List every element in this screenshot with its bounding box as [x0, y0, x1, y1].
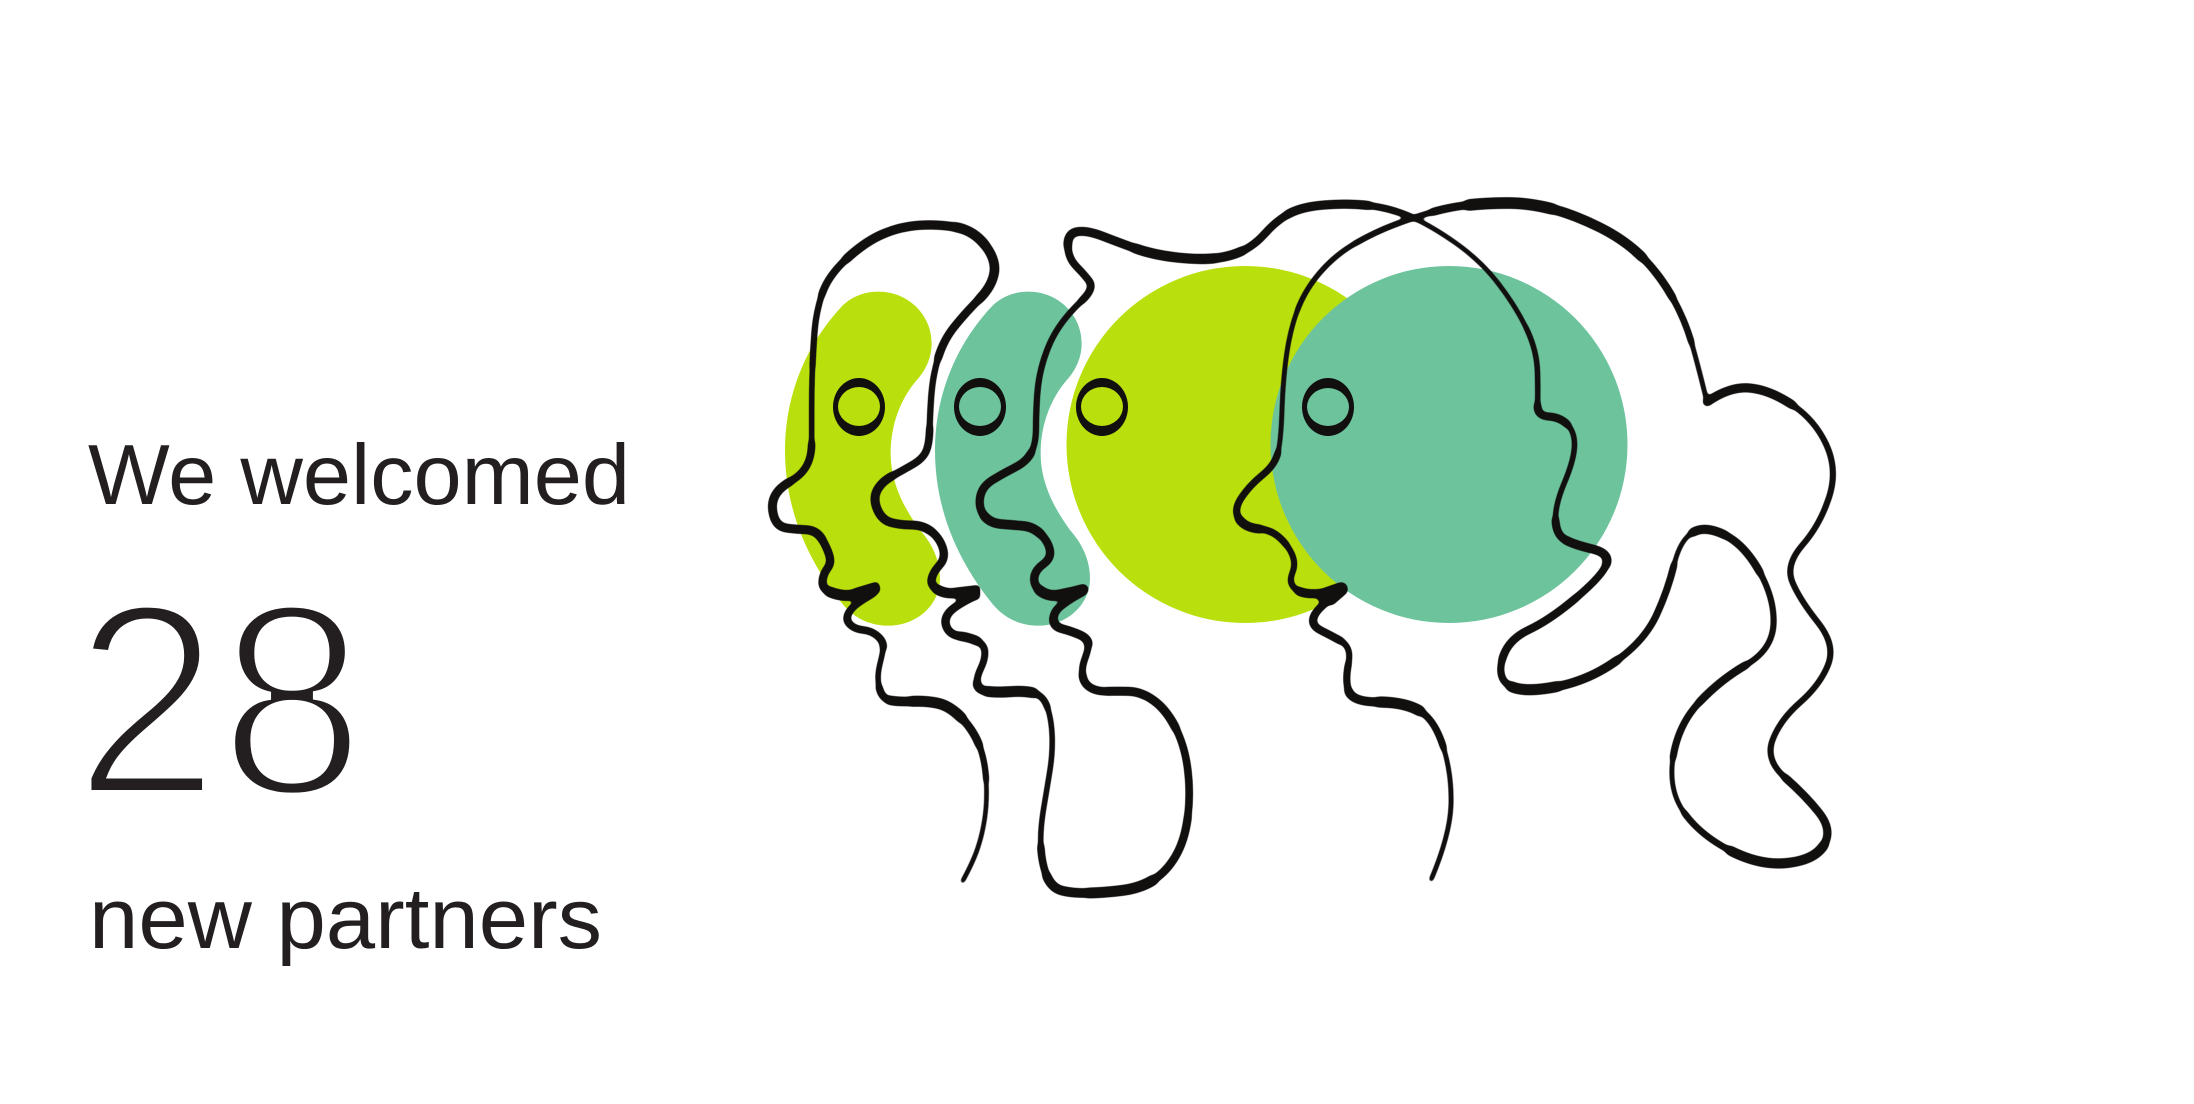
line: first face profile and hair	[772, 225, 995, 596]
line: fourth face nose and lips	[1237, 452, 1347, 605]
icon: first face lip	[848, 582, 879, 603]
icon: second face lip	[953, 586, 979, 604]
text: new partners: new partners	[89, 871, 602, 967]
illustration: background colour shapes	[785, 266, 1628, 626]
line: fourth face chin and neck	[1313, 592, 1451, 880]
shape: teal crescent	[935, 292, 1090, 626]
line art: fourth face, hair and top line	[1215, 203, 1833, 880]
line: first face neck and chin	[847, 593, 987, 882]
line art: faces one to three	[772, 225, 1215, 893]
line: fourth head face side and shoulder	[1410, 216, 1674, 690]
line: second face chin and torso outline	[945, 592, 1189, 893]
line art: continuous line drawing of four faces	[772, 203, 1833, 893]
shape: lime crescent	[785, 292, 940, 626]
icons: eyes	[833, 378, 1354, 436]
line: second face profile	[875, 428, 975, 593]
line: head top arc	[1278, 203, 1707, 452]
line: third face profile and forehead	[980, 231, 1215, 596]
text: We welcomed: We welcomed	[88, 428, 630, 523]
icon: eye one	[833, 378, 885, 436]
icon: eye four	[1302, 378, 1354, 436]
line: hair curl	[1672, 388, 1833, 863]
icon: eye two	[954, 378, 1006, 436]
line: top wave	[1215, 204, 1410, 258]
number: 28: 28	[74, 548, 365, 854]
shape: teal circle	[1270, 266, 1628, 623]
shape: lime circle	[1066, 266, 1424, 623]
icon: eye three	[1076, 378, 1128, 436]
icon: third face lip	[1057, 586, 1085, 603]
